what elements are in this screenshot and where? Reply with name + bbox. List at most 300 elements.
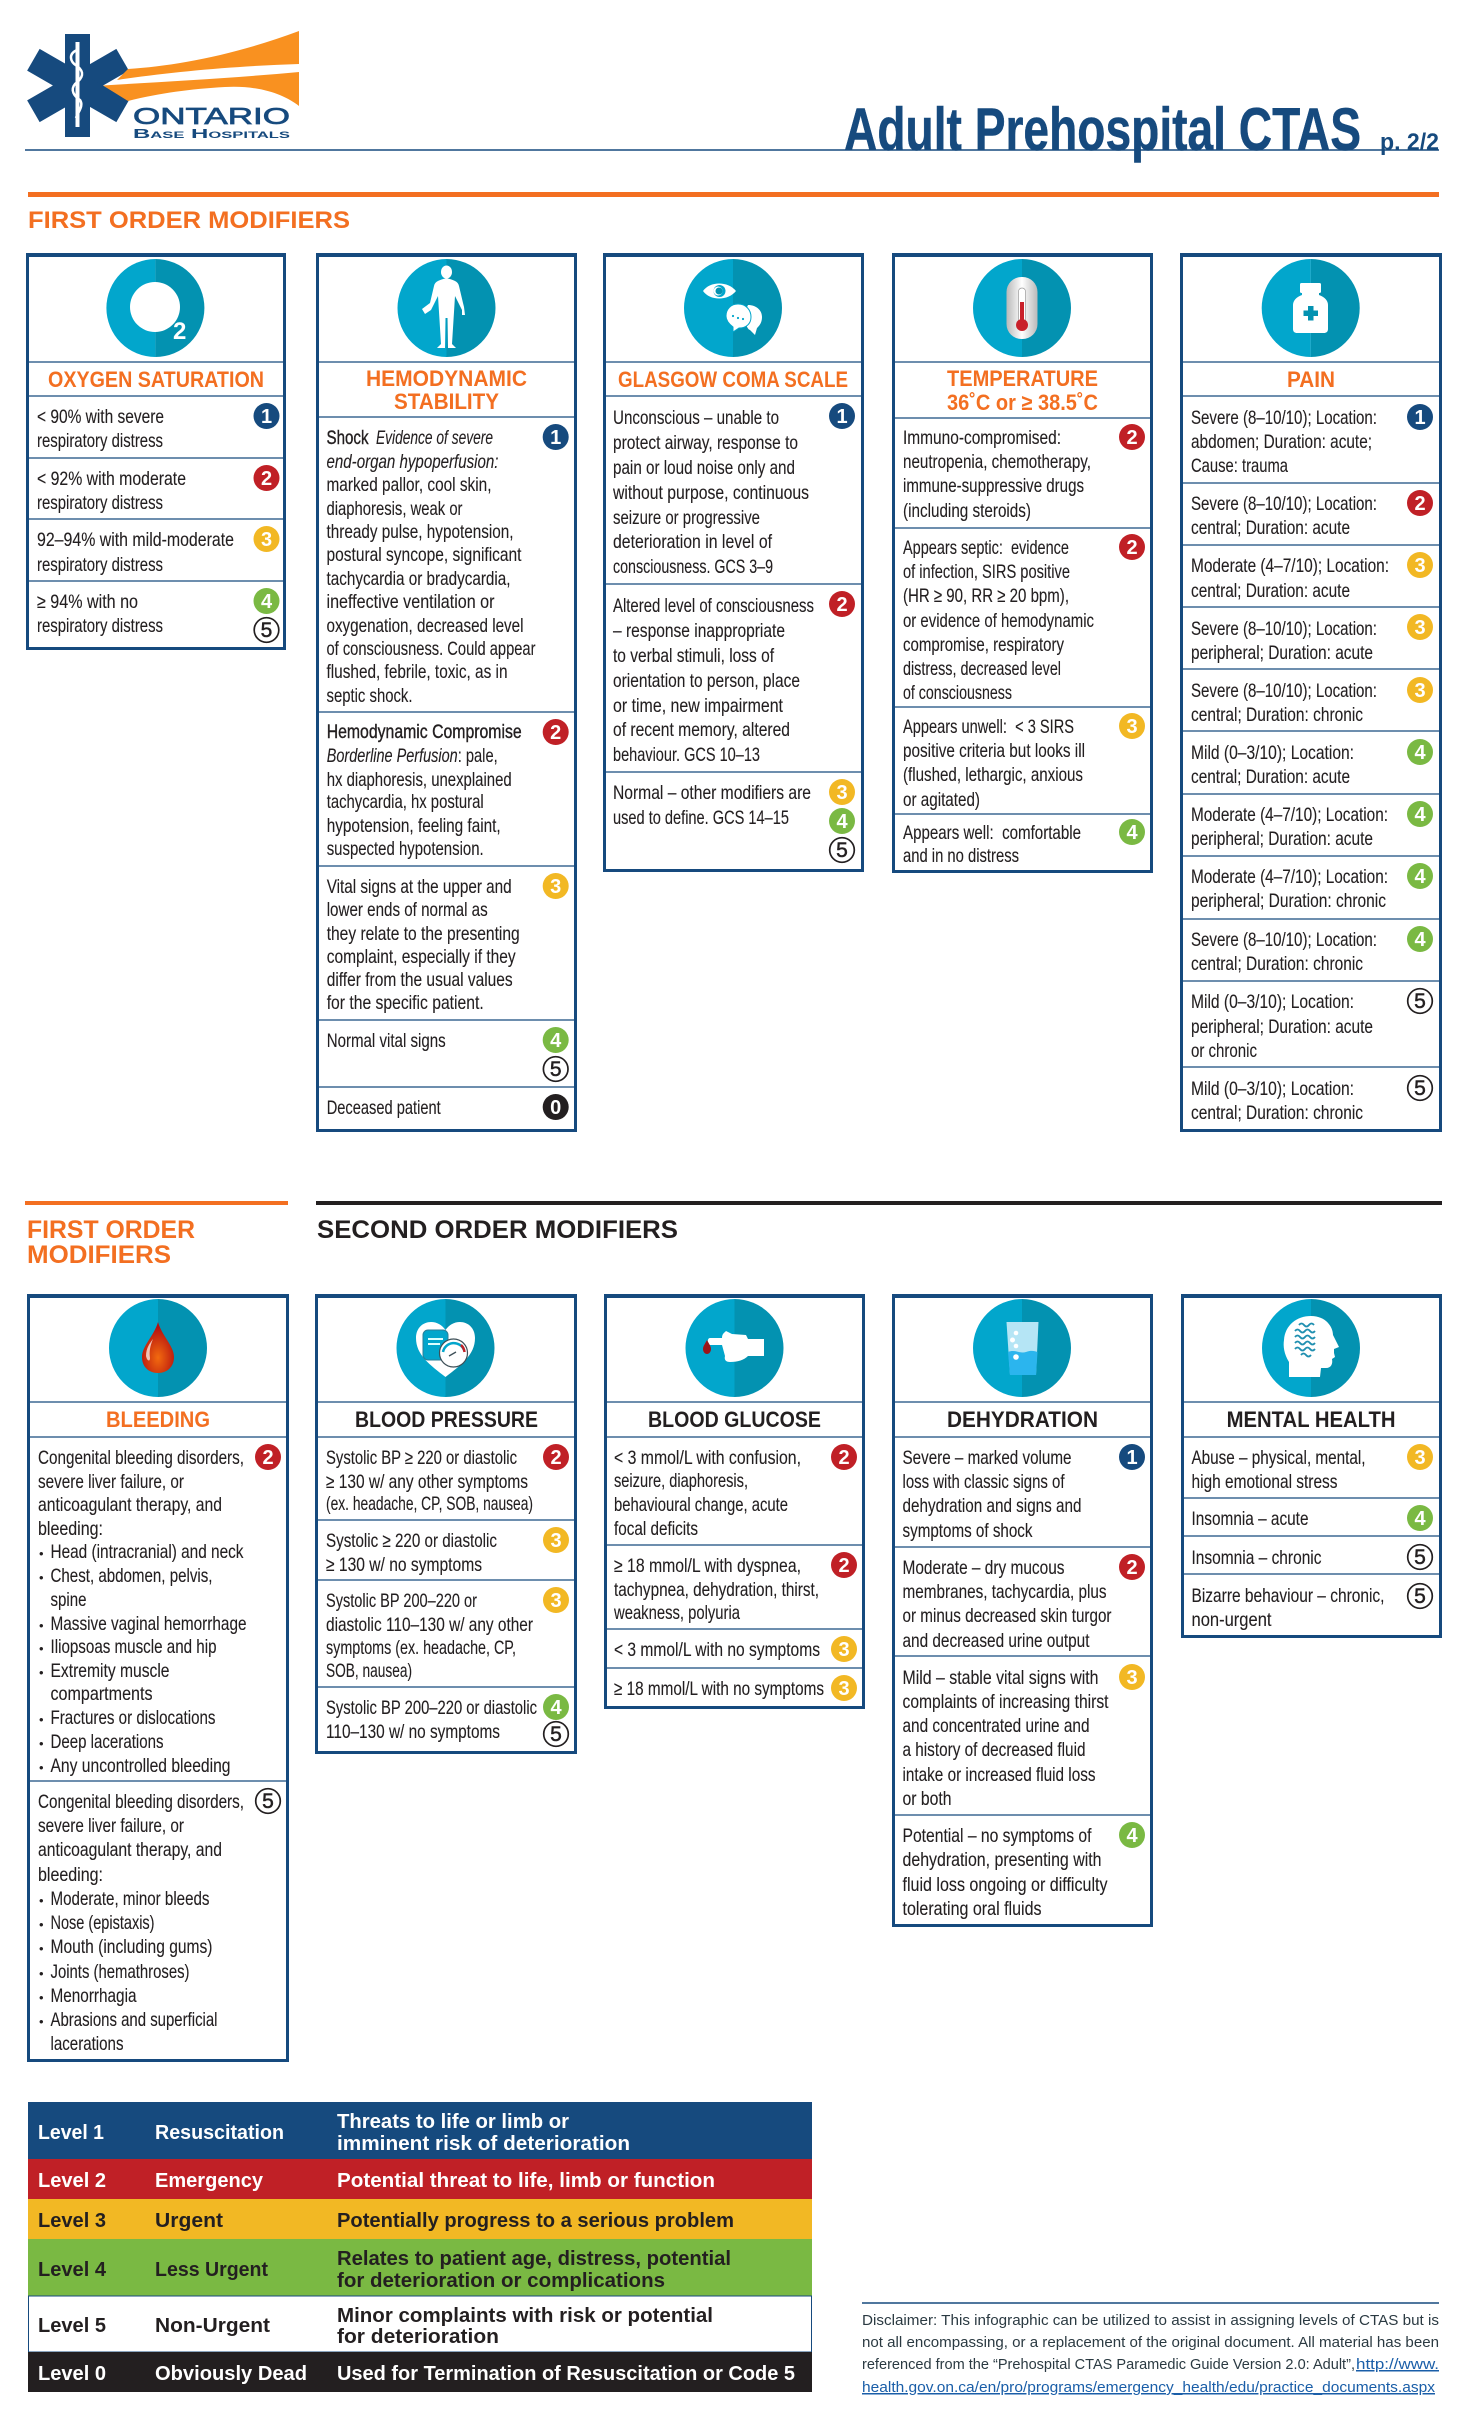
row: normal, levels 3 4 5: used to define. GCS 14–15 <box>613 807 789 829</box>
row: shock, level 1: tachycardia or bradycardia, <box>326 568 510 590</box>
badge: level 2: 2 <box>1126 537 1138 559</box>
icon: blood pressure monitor in heart <box>396 1299 494 1397</box>
row: unconscious, level 1: seizure or progressive <box>613 507 760 529</box>
legend row: level 2: Level 2 <box>38 2169 106 2192</box>
row: 92-94 percent, level 3 <box>37 526 280 576</box>
disclaimer <box>862 2312 1439 2396</box>
row: appears septic, level 2 <box>903 534 1145 704</box>
badge: level 3 <box>1407 614 1433 640</box>
legend row: level 4: Relates to patient age, distress, potential <box>337 2247 731 2270</box>
icon: glass of water <box>973 1299 1071 1397</box>
row: moderate central acute, level 3: Moderate (4–7/10); Location: <box>1191 555 1389 577</box>
badge: level 4 <box>1119 1822 1145 1848</box>
row: normal vital signs, levels 4 and 5: Normal vital signs <box>327 1030 446 1052</box>
badge: level 1 <box>543 424 569 450</box>
badge: level 3 <box>1407 1444 1433 1470</box>
row: immuno-compromised, level 2 <box>903 424 1145 522</box>
row: minor bleeding, level 5: bleeding: <box>38 1864 103 1886</box>
row: moderate, level 2: and decreased urine output <box>902 1630 1090 1652</box>
row: severe abdomen trauma, level 1 <box>1191 404 1433 477</box>
row: minor bleeding, level 5: Moderate, minor bleeds <box>50 1888 210 1910</box>
row: appears unwell, level 3 <box>903 713 1145 811</box>
legend row: level 3: Level 3 <box>38 2209 106 2232</box>
row: severe central chronic, level 4: central; Duration: chronic <box>1191 953 1363 975</box>
row: minor bleeding, level 5: • <box>39 1990 44 2005</box>
logo orange swoosh <box>103 31 299 106</box>
row: under 92 percent, level 2: < 92% with moderate <box>37 468 186 490</box>
badge: level 4 <box>1119 819 1145 845</box>
row: severe peripheral acute, level 3: peripheral; Duration: acute <box>1191 642 1373 664</box>
row: abuse, level 3 <box>1192 1444 1433 1493</box>
row: severe, level 1 <box>902 1444 1145 1542</box>
row: mild, level 3: a history of decreased fluid <box>902 1739 1086 1761</box>
heading: mental health: MENTAL HEALTH <box>1227 1407 1396 1432</box>
badge: level 2: 2 <box>838 1447 850 1469</box>
badge: level 3: 3 <box>1414 1447 1426 1469</box>
row: shock, level 1: Evidence of severe <box>376 427 493 449</box>
heading: first order modifiers continued: FIRST ORDER <box>27 1216 195 1244</box>
row: severe peripheral acute, level 3 <box>1191 614 1433 664</box>
badge: level 5: 5 <box>1414 1077 1426 1100</box>
row: mild, level 3: complaints of increasing thirst <box>902 1691 1109 1713</box>
heading: second order modifiers: SECOND ORDER MODIFIERS <box>317 1216 678 1244</box>
row: hemodynamic compromise, level 2: : pale, <box>458 745 498 767</box>
row: severe, level 1: symptoms of shock <box>902 1520 1033 1542</box>
badge: level 5: 5 <box>1414 990 1426 1013</box>
badge: level 5 <box>830 838 854 862</box>
row: mild peripheral, level 5: Mild (0–3/10); Location: <box>1191 991 1354 1013</box>
row: vital signs at ends of normal, level 3 <box>327 873 569 1014</box>
row: shock, level 1: diaphoresis, weak or <box>326 498 463 520</box>
badge: level 5 <box>543 1057 568 1081</box>
badge: level 3: 3 <box>550 1590 562 1612</box>
badge: level 4 <box>1407 739 1433 765</box>
row: appears septic, level 2: of consciousness <box>903 682 1012 704</box>
row: moderate peripheral acute, level 4: Moderate (4–7/10); Location: <box>1191 804 1388 826</box>
row: under 90 percent, level 1: respiratory distress <box>37 430 163 452</box>
legend: CTAS levels table <box>28 2102 812 2392</box>
badge: level 5 <box>544 1722 568 1746</box>
row: abuse, level 3: high emotional stress <box>1192 1471 1338 1493</box>
heading: pain: PAIN <box>1287 367 1335 392</box>
legend row: level 5: Level 5 <box>38 2314 106 2337</box>
row: low glucose symptoms, level 2 <box>614 1444 857 1540</box>
row: shock, level 1: thready pulse, hypotension, <box>326 521 514 543</box>
badge: level 2: 2 <box>550 722 561 744</box>
icon: thermometer <box>973 259 1071 357</box>
row: bizarre behaviour, level 5: non-urgent <box>1192 1609 1272 1631</box>
badge: level 3 <box>1119 713 1145 739</box>
legend row: level 5: Minor complaints with risk or potential <box>337 2304 713 2327</box>
badge: level 3 <box>831 1636 857 1662</box>
row: moderate peripheral chronic, level 4: Moderate (4–7/10); Location: <box>1191 866 1388 888</box>
badge: level 2 <box>831 1444 857 1470</box>
row: moderate central acute, level 3 <box>1191 552 1433 602</box>
row: shock, level 1: Shock <box>326 427 369 449</box>
row: systolic 220 any symptoms, level 2 <box>326 1444 569 1515</box>
legend row: level 1: Threats to life or limb or <box>337 2110 569 2133</box>
badge: level 4: 4 <box>550 1030 562 1052</box>
row: systolic 200-220 any symptoms, level 3: Systolic BP 200–220 or <box>326 1590 477 1612</box>
row: at least 94 percent, levels 4 and 5: ≥ 94% with no <box>37 591 138 613</box>
row: potential, level 4 <box>902 1822 1145 1920</box>
row: shock, level 1: marked pallor, cool skin, <box>326 474 492 496</box>
row: hemodynamic compromise, level 2: Borderline Perfusion <box>327 745 458 767</box>
panel: bleeding <box>27 1294 289 2062</box>
badge: level 4 <box>1407 1505 1433 1531</box>
row: shock, level 1: oxygenation, decreased level <box>326 615 524 637</box>
heading: blood pressure: BLOOD PRESSURE <box>355 1407 538 1432</box>
disclaimer: Disclaimer: This infographic can be utilized to assist in assigning levels of CTAS but is <box>862 2312 1439 2329</box>
row: severe central acute, level 2 <box>1191 490 1433 539</box>
row: normal vital signs, levels 4 and 5 <box>327 1027 569 1081</box>
badge: level 4: 4 <box>1126 1825 1138 1847</box>
row: high glucose symptoms, level 2: weakness, polyuria <box>613 1602 740 1624</box>
row: appears septic, level 2: distress, decreased level <box>903 658 1061 680</box>
badge: level 3 <box>254 526 280 552</box>
legend row: level 0 <box>28 2352 812 2392</box>
heading: hemodynamic stability: STABILITY <box>394 389 499 414</box>
disclaimer: not all encompassing, or a replacement of the original document. All material has been <box>862 2334 1439 2351</box>
row: altered consciousness, level 2: behaviour. GCS 10–13 <box>613 744 760 766</box>
row: under 92 percent, level 2 <box>37 465 280 514</box>
row: minor bleeding, level 5: • <box>39 1941 44 1956</box>
row: severe central chronic, level 3: central; Duration: chronic <box>1191 704 1363 726</box>
legend row: level 0: Level 0 <box>38 2362 106 2385</box>
badge: level 4: 4 <box>1414 804 1426 826</box>
row: mild central chronic, level 5: central; Duration: chronic <box>1191 1102 1363 1124</box>
row: shock, level 1: flushed, febrile, toxic, as in <box>326 661 508 683</box>
row: altered consciousness, level 2: to verbal stimuli, loss of <box>613 645 774 667</box>
badge: level 2 <box>255 1444 281 1470</box>
row: shock, level 1: of consciousness. Could appear <box>326 638 536 660</box>
row: insomnia acute, level 4 <box>1192 1505 1433 1531</box>
badge: level 4: 4 <box>261 591 273 613</box>
disclaimer: referenced from the “Prehospital CTAS Paramedic Guide Version 2.0: Adult”, <box>862 2356 1355 2373</box>
row: unconscious, level 1: without purpose, continuous <box>612 482 809 504</box>
row: vital signs at ends of normal, level 3: Vital signs at the upper and <box>327 876 512 898</box>
row: shock, level 1: end-organ hypoperfusion: <box>326 451 498 473</box>
row: bizarre behaviour, level 5: Bizarre behaviour – chronic, <box>1192 1585 1384 1607</box>
badge: level 5: 5 <box>262 1790 274 1813</box>
badge: level 3 <box>1407 552 1433 578</box>
logo wordmark: Base Hospitals <box>133 126 290 141</box>
heading: temperature: TEMPERATURE <box>947 366 1098 391</box>
badge: level 1: 1 <box>1126 1447 1138 1469</box>
row: low glucose symptoms, level 2: focal deficits <box>614 1518 698 1540</box>
badge: level 3 <box>829 779 855 805</box>
row: major bleeding, level 2: • <box>39 1712 44 1727</box>
row: major bleeding, level 2: Congenital bleeding disorders, <box>38 1447 244 1469</box>
row: vital signs at ends of normal, level 3: they relate to the presenting <box>327 923 520 945</box>
row: major bleeding, level 2: Deep lacerations <box>50 1731 164 1753</box>
row: high glucose symptoms, level 2: ≥ 18 mmol/L with dyspnea, <box>614 1555 801 1577</box>
badge: level 4 <box>1407 926 1433 952</box>
row: severe, level 1: dehydration and signs and <box>902 1495 1082 1517</box>
row: systolic 220 any symptoms, level 2: ≥ 130 w/ any other symptoms <box>326 1471 528 1493</box>
heading: first order modifiers continued: MODIFIERS <box>27 1241 171 1269</box>
row: low glucose symptoms, level 2: behavioural change, acute <box>614 1494 788 1516</box>
disclaimer: health.gov.on.ca/en/pro/programs/emergency_health/edu/practice_documents.aspx <box>862 2379 1436 2396</box>
row: appears unwell, level 3: or agitated) <box>903 789 980 811</box>
legend row: level 1: Resuscitation <box>155 2121 284 2144</box>
heading: blood glucose: BLOOD GLUCOSE <box>648 1407 821 1432</box>
row: major bleeding, level 2: Extremity muscle <box>50 1660 170 1682</box>
legend row: level 2: Emergency <box>155 2169 264 2192</box>
heading: hemodynamic stability <box>366 366 527 414</box>
badge: level 4 <box>1407 863 1433 889</box>
row: severe abdomen trauma, level 1: abdomen; Duration: acute; <box>1191 431 1372 453</box>
badge: level 4: 4 <box>836 811 848 833</box>
row: deceased patient, level 0: Deceased patient <box>327 1097 441 1119</box>
badge: level 3: 3 <box>838 1678 850 1700</box>
row: altered consciousness, level 2: Altered level of consciousness <box>613 595 814 617</box>
row: altered consciousness, level 2 <box>613 591 855 766</box>
badge: level 5: 5 <box>1414 1585 1426 1608</box>
panel: blood glucose <box>604 1294 865 1709</box>
row: hemodynamic compromise, level 2 <box>327 719 569 860</box>
icon: O2: 2 <box>173 318 186 345</box>
row: minor bleeding, level 5: Nose (epistaxis) <box>50 1912 154 1934</box>
row: altered consciousness, level 2: or time, new impairment <box>613 695 783 717</box>
row: major bleeding, level 2: Massive vaginal hemorrhage <box>50 1613 246 1635</box>
legend row: level 3 <box>28 2199 812 2239</box>
row: mild, level 3: intake or increased fluid loss <box>902 1764 1096 1786</box>
legend row: level 3: Urgent <box>155 2209 223 2232</box>
row: mild peripheral, level 5: peripheral; Duration: acute <box>1191 1016 1373 1038</box>
heading: oxygen saturation: OXYGEN SATURATION <box>48 367 264 392</box>
row: deceased patient, level 0 <box>327 1094 569 1120</box>
legend row: level 0: Used for Termination of Resuscitation or Code 5 <box>337 2362 795 2385</box>
row: minor bleeding, level 5: Abrasions and superficial <box>50 2009 218 2031</box>
badge: level 2: 2 <box>261 468 272 490</box>
heading: first order modifiers continued <box>27 1216 195 1269</box>
badge: level 3: 3 <box>1414 555 1426 577</box>
badge: level 3: 3 <box>1414 617 1426 639</box>
row: at least 94 percent, levels 4 and 5 <box>37 588 280 642</box>
row: appears unwell, level 3: positive criteria but looks ill <box>903 740 1085 762</box>
row: major bleeding, level 2: bleeding: <box>38 1518 103 1540</box>
row: hemodynamic compromise, level 2: Hemodynamic Compromise <box>327 721 522 743</box>
row: systolic 200-220 any symptoms, level 3: symptoms (ex. headache, CP, <box>326 1637 516 1659</box>
row: moderate, level 2: membranes, tachycardia, plus <box>902 1581 1107 1603</box>
row: severe, level 1: loss with classic signs of <box>902 1471 1065 1493</box>
badge: level 2 <box>1119 424 1145 450</box>
badge: level 5 <box>1408 1076 1432 1100</box>
row: appears septic, level 2: (HR ≥ 90, RR ≥ 20 bpm), <box>903 585 1069 607</box>
panel: oxygen saturation <box>26 253 286 650</box>
row: normal, levels 3 4 5: Normal – other modifiers are <box>613 782 811 804</box>
badge: level 2 <box>543 719 569 745</box>
badge: level 3 <box>543 1527 569 1553</box>
panel: pain <box>1180 253 1442 1132</box>
page number: p. 2/2 <box>1380 129 1439 156</box>
row: high glucose no symptoms, level 3: ≥ 18 mmol/L with no symptoms <box>614 1678 824 1700</box>
badge: level 4: 4 <box>550 1697 562 1719</box>
badge: level 5 <box>256 1789 280 1813</box>
legend row: level 4: Less Urgent <box>155 2258 268 2281</box>
legend row: level 5: Non-Urgent <box>155 2314 270 2337</box>
row: moderate peripheral chronic, level 4: peripheral; Duration: chronic <box>1191 890 1386 912</box>
row: unconscious, level 1: consciousness. GCS 3–9 <box>613 556 773 578</box>
badge: level 2 <box>1119 1554 1145 1580</box>
badge: level 5 <box>1408 1545 1432 1569</box>
row: mild, level 3: Mild – stable vital signs with <box>902 1667 1098 1689</box>
row: under 90 percent, level 1: < 90% with severe <box>37 406 164 428</box>
badge: level 3: 3 <box>550 1530 562 1552</box>
row: unconscious, level 1 <box>612 403 855 578</box>
legend row: level 5: for deterioration <box>337 2325 499 2348</box>
row: mild peripheral, level 5: or chronic <box>1191 1040 1257 1062</box>
badge: level 5: 5 <box>1414 1546 1426 1569</box>
badge: level 3: 3 <box>838 1639 850 1661</box>
row: hemodynamic compromise, level 2: hx diaphoresis, unexplained <box>327 769 512 791</box>
badge: level 1: 1 <box>836 406 848 428</box>
badge: level 3: 3 <box>550 876 561 898</box>
row: systolic 200-220 no symptoms, levels 4 and 5: Systolic BP 200–220 or diastolic <box>326 1697 537 1719</box>
heading: hemodynamic stability: HEMODYNAMIC <box>366 366 527 391</box>
badge: level 3: 3 <box>836 782 848 804</box>
row: minor bleeding, level 5: Congenital bleeding disorders, <box>38 1791 244 1813</box>
badge: level 0 <box>543 1094 569 1120</box>
row: major bleeding, level 2 <box>38 1444 281 1777</box>
row: unconscious, level 1: pain or loud noise only and <box>613 457 795 479</box>
row: hemodynamic compromise, level 2: hypotension, feeling faint, <box>327 815 501 837</box>
row: unconscious, level 1: deterioration in level of <box>613 531 772 553</box>
row: moderate peripheral acute, level 4 <box>1191 801 1433 850</box>
row: low glucose symptoms, level 2: < 3 mmol/L with confusion, <box>614 1447 801 1469</box>
row: potential, level 4: fluid loss ongoing or difficulty <box>902 1874 1108 1896</box>
badge: level 4: 4 <box>1126 822 1138 844</box>
icon: head with waves <box>1262 1299 1360 1397</box>
row: potential, level 4: Potential – no symptoms of <box>902 1825 1092 1847</box>
badge: level 2: 2 <box>1414 493 1426 515</box>
row: severe central acute, level 2: Severe (8–10/10); Location: <box>1191 493 1377 515</box>
legend row: level 2 <box>28 2159 812 2199</box>
logo star of life <box>27 34 129 137</box>
row: moderate, level 2: or minus decreased skin turgor <box>902 1605 1112 1627</box>
row: severe central chronic, level 4 <box>1191 926 1433 975</box>
row: major bleeding, level 2: • <box>39 1641 44 1656</box>
disclaimer: http://www. <box>1356 2356 1439 2373</box>
row: major bleeding, level 2: anticoagulant therapy, and <box>38 1494 222 1516</box>
row: systolic 220 any symptoms, level 2: (ex. headache, CP, SOB, nausea) <box>326 1493 533 1515</box>
row: appears well, level 4: and in no distress <box>903 845 1019 867</box>
badge: level 4 <box>254 588 280 614</box>
row: severe central chronic, level 3: Severe (8–10/10); Location: <box>1191 680 1377 702</box>
badge: level 5 <box>1408 1584 1432 1608</box>
badge: level 3 <box>543 873 569 899</box>
row: systolic 200-220 no symptoms, levels 4 and 5: 110–130 w/ no symptoms <box>326 1721 500 1743</box>
row: major bleeding, level 2: • <box>39 1736 44 1751</box>
row: low glucose no symptoms, level 3: < 3 mmol/L with no symptoms <box>614 1639 820 1661</box>
panel: blood pressure <box>315 1294 577 1754</box>
row: abuse, level 3: Abuse – physical, mental, <box>1192 1447 1366 1469</box>
panel: glasgow coma scale <box>603 253 864 872</box>
row: minor bleeding, level 5: • <box>39 1917 44 1932</box>
row: appears septic, level 2: compromise, respiratory <box>903 634 1064 656</box>
badge: level 2: 2 <box>1126 1557 1138 1579</box>
panel: temperature <box>892 253 1153 873</box>
row: major bleeding, level 2: Chest, abdomen, pelvis, <box>50 1565 212 1587</box>
row: major bleeding, level 2: • <box>39 1618 44 1633</box>
badge: level 3: 3 <box>261 529 272 551</box>
row: major bleeding, level 2: Fractures or dislocations <box>50 1707 216 1729</box>
legend row: level 4 <box>28 2239 812 2296</box>
badge: level 1 <box>1119 1444 1145 1470</box>
row: severe abdomen trauma, level 1: Severe (8–10/10); Location: <box>1191 407 1377 429</box>
panel: dehydration <box>892 1294 1153 1927</box>
row: severe central chronic, level 4: Severe (8–10/10); Location: <box>1191 929 1377 951</box>
row: vital signs at ends of normal, level 3: differ from the usual values <box>327 969 513 991</box>
row: mild peripheral, level 5 <box>1191 989 1432 1062</box>
row: mild, level 3: and concentrated urine and <box>902 1715 1090 1737</box>
row: insomnia chronic, level 5: Insomnia – chronic <box>1192 1547 1322 1569</box>
row: major bleeding, level 2: • <box>39 1665 44 1680</box>
row: appears septic, level 2: or evidence of hemodynamic <box>903 610 1094 632</box>
row: insomnia acute, level 4: Insomnia – acute <box>1192 1508 1308 1530</box>
badge: level 2: 2 <box>550 1447 562 1469</box>
row: appears well, level 4 <box>903 819 1145 867</box>
row: systolic 200-220 any symptoms, level 3 <box>326 1587 569 1682</box>
row: major bleeding, level 2: spine <box>50 1589 86 1611</box>
badge: level 4: 4 <box>1414 929 1426 951</box>
badge: level 4: 4 <box>1414 866 1426 888</box>
badge: level 2: 2 <box>262 1447 274 1469</box>
logo: Ontario Base Hospitals <box>27 31 299 141</box>
badge: level 2 <box>831 1552 857 1578</box>
row: appears well, level 4: Appears well: comfortable <box>903 822 1081 844</box>
row: low glucose symptoms, level 2: seizure, diaphoresis, <box>614 1470 748 1492</box>
badge: level 4 <box>1407 801 1433 827</box>
badge: level 3 <box>1119 1664 1145 1690</box>
row: severe central acute, level 2: central; Duration: acute <box>1191 517 1350 539</box>
legend row: level 4: Level 4 <box>38 2258 107 2281</box>
row: major bleeding, level 2: Any uncontrolled bleeding <box>50 1755 230 1777</box>
legend row: level 1: Level 1 <box>38 2121 104 2144</box>
row: severe peripheral acute, level 3: Severe (8–10/10); Location: <box>1191 618 1377 640</box>
heading: bleeding: BLEEDING <box>106 1407 210 1432</box>
row: unconscious, level 1: Unconscious – unable to <box>613 407 779 429</box>
badge: level 5: 5 <box>261 619 272 642</box>
icon: finger prick <box>686 1299 784 1397</box>
row: 92-94 percent, level 3: respiratory distress <box>37 554 163 576</box>
row: moderate peripheral chronic, level 4 <box>1191 863 1433 912</box>
badge: level 1 <box>1407 404 1433 430</box>
row: mild central chronic, level 5: Mild (0–3/10); Location: <box>1191 1078 1354 1100</box>
row: altered consciousness, level 2: orientation to person, place <box>613 670 800 692</box>
row: potential, level 4: tolerating oral fluids <box>902 1898 1042 1920</box>
badge: level 4: 4 <box>1414 1508 1426 1530</box>
row: moderate peripheral acute, level 4: peripheral; Duration: acute <box>1191 828 1373 850</box>
badge: level 2: 2 <box>1126 427 1138 449</box>
heading: first order modifiers: FIRST ORDER MODIFIERS <box>28 207 350 234</box>
badge: level 2: 2 <box>836 594 848 616</box>
row: under 92 percent, level 2: respiratory distress <box>37 492 163 514</box>
badge: level 2 <box>254 465 280 491</box>
badge: level 4 <box>543 1027 569 1053</box>
row: minor bleeding, level 5: Menorrhagia <box>50 1985 137 2007</box>
badge: level 2 <box>829 591 855 617</box>
row: immuno-compromised, level 2: neutropenia, chemotherapy, <box>903 451 1091 473</box>
row: moderate, level 2 <box>902 1554 1145 1652</box>
badge: level 5: 5 <box>836 839 848 862</box>
badge: level 3: 3 <box>1126 716 1138 738</box>
row: major bleeding, level 2: • <box>39 1570 44 1585</box>
row: severe, level 1: Severe – marked volume <box>902 1447 1072 1469</box>
badge: level 5 <box>1408 989 1432 1013</box>
row: major bleeding, level 2: compartments <box>50 1683 153 1705</box>
